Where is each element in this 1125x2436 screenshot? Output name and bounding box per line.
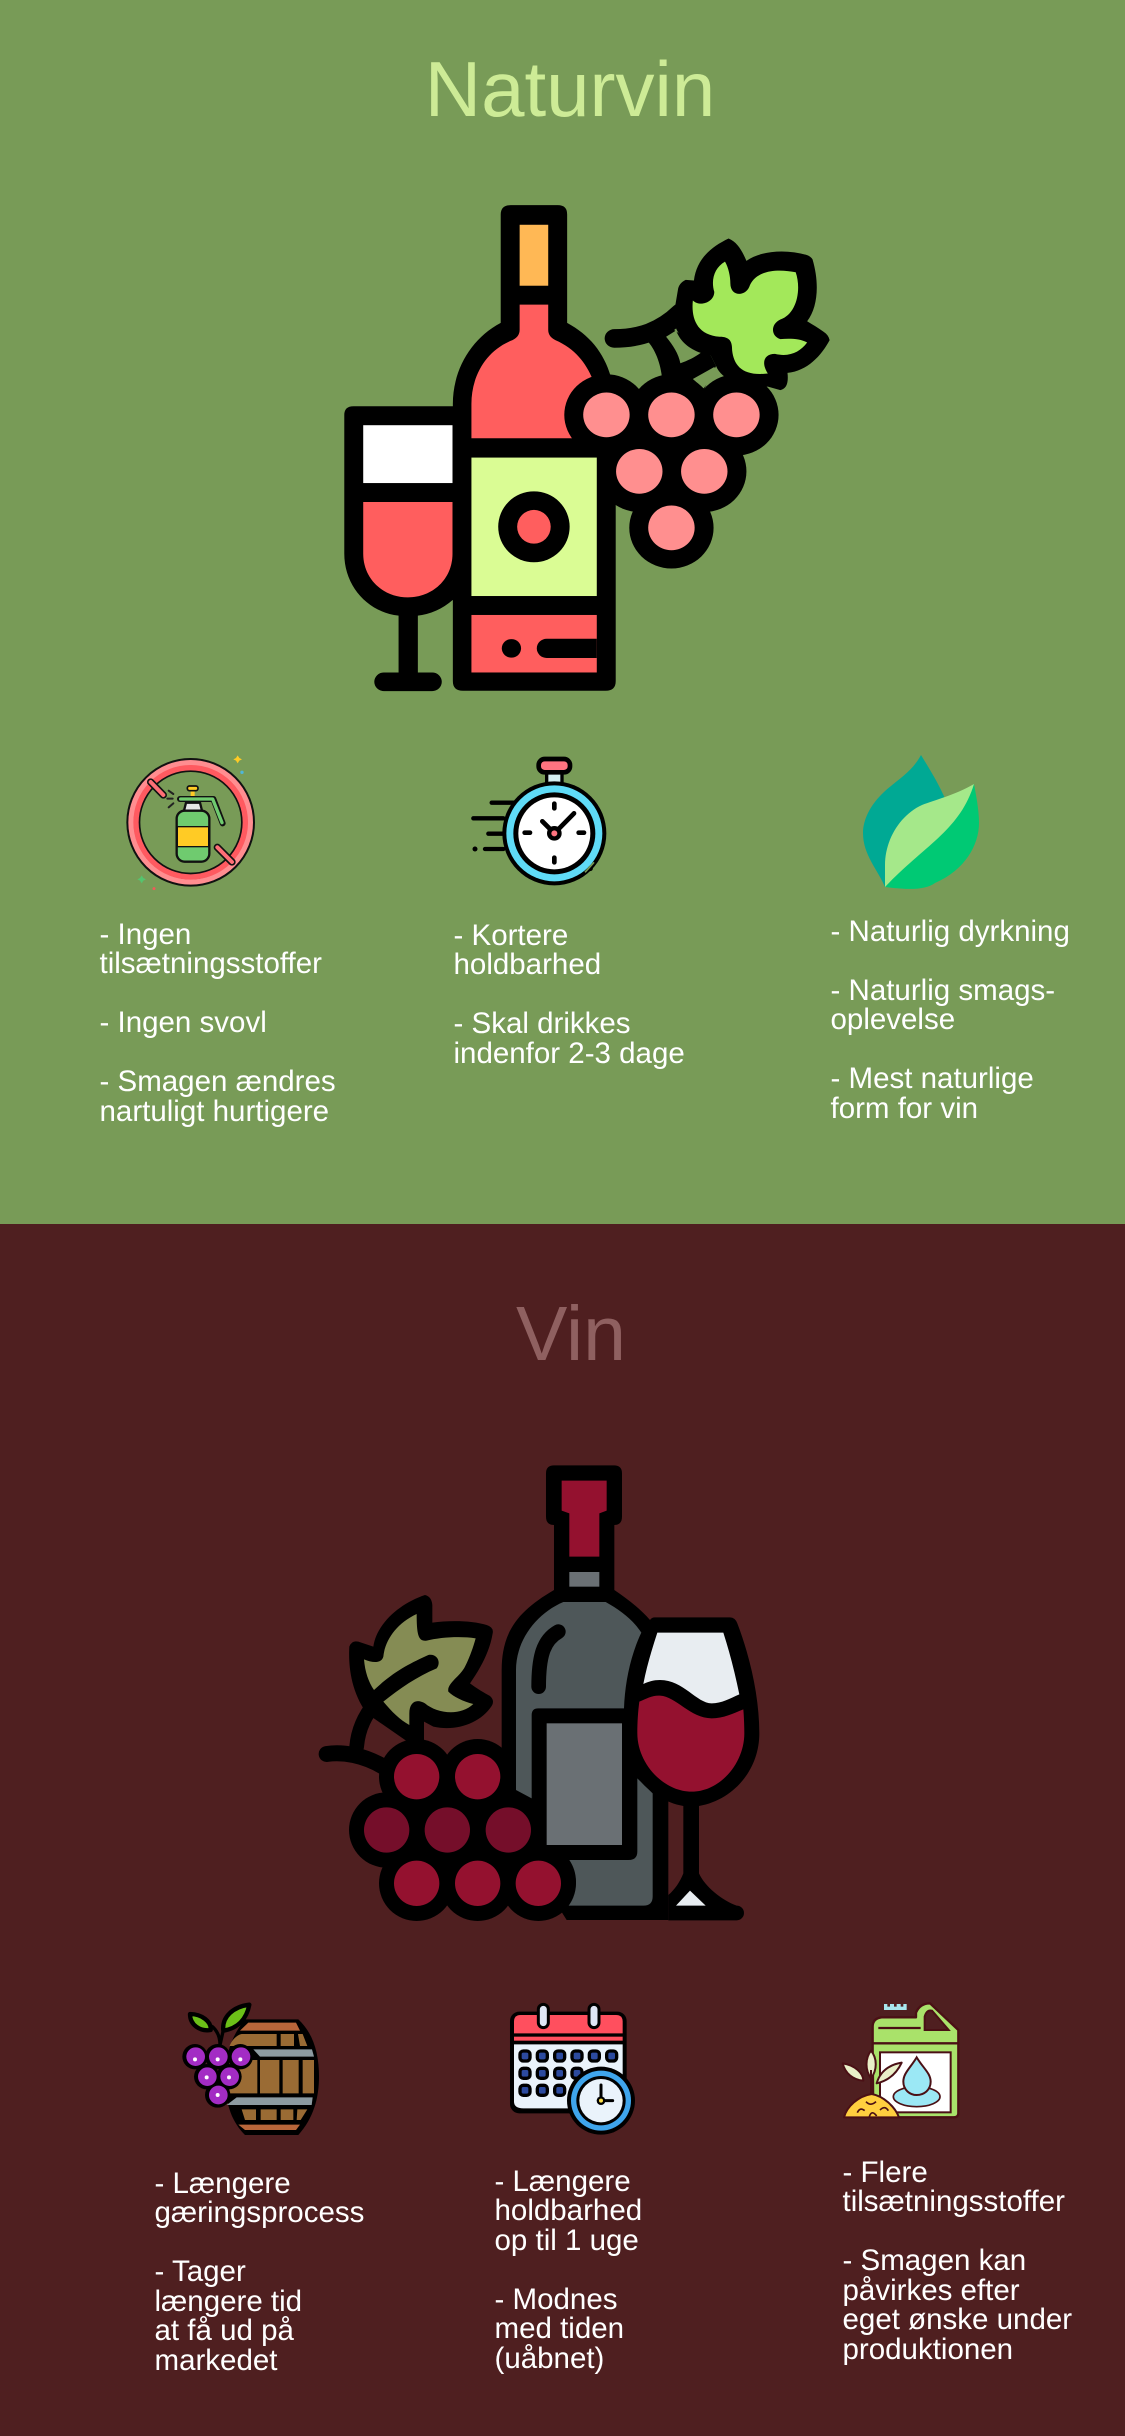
clock [567,2067,635,2135]
barrel [225,2019,319,2135]
title: Naturvin: Naturvin [425,45,715,133]
panel: Naturvin [0,0,1125,1224]
leaf [673,239,830,390]
text: column 1: - Længere gæringsprocess - Tager længere tid at få ud på markedet [154,2166,364,2376]
vine stems [327,1703,417,1767]
text: column 3: - Naturlig dyrkning - Naturlig smags- oplevelse - Mest naturlige form for vin [830,914,1070,1124]
vine stems [614,313,720,390]
icon: barrel with grapes [182,2005,319,2135]
grapes [564,374,779,568]
wine glass [623,1617,759,1920]
bottle [502,1465,668,1920]
title: Vin: Vin [516,1291,626,1377]
icon: no pesticide spray [131,755,250,890]
panel: Vin [0,1224,1125,2436]
text: column 2: - Kortere holdbarhed - Skal drikkes indenfor 2-3 dage [454,918,685,1070]
leaf [349,1595,493,1743]
text: column 2: - Længere holdbarhed op til 1 uge - Modnes med tiden (uåbnet) [494,2164,642,2374]
grapes [182,2044,253,2108]
stem and leaves [190,2005,249,2045]
icon: hero wine bottle, glass and grapes [344,205,830,691]
icon: stopwatch [472,759,606,885]
icon: leaf [863,755,979,889]
bottle [453,205,616,691]
grapes [349,1739,576,1921]
icon: calendar with clock [510,2004,635,2135]
text: column 1: - Ingen tilsætningsstoffer - Ingen svovl - Smagen ændres nartuligt hurtigere [100,918,336,1128]
icon: hero wine bottle, glass and grapes [327,1465,759,1921]
text: column 3: - Flere tilsætningsstoffer - Smagen kan påvirkes efter eget ønske under produktionen [842,2156,1072,2366]
glass [344,406,468,691]
icon: fertilizer jug with plant [843,2003,958,2117]
